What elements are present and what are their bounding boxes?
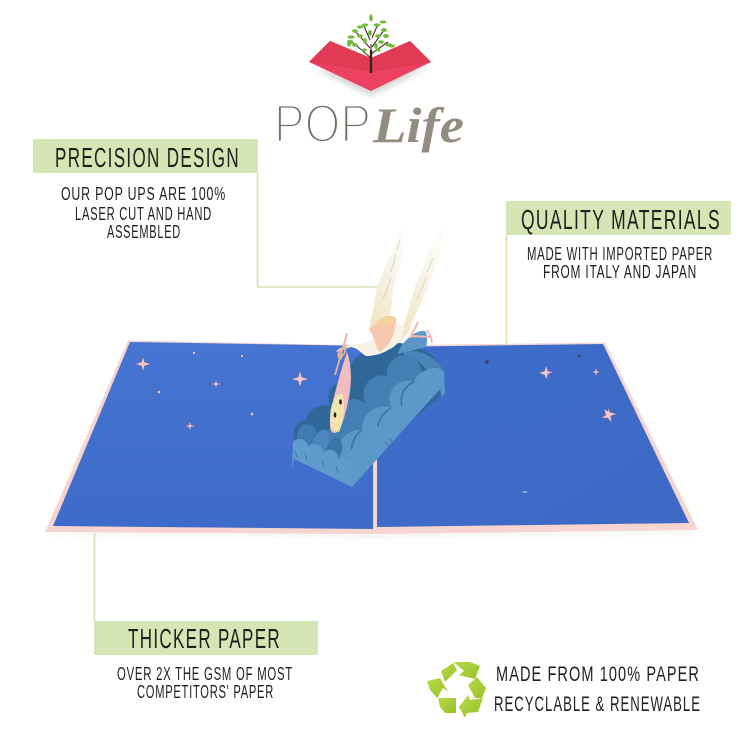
card: left blue panel <box>53 342 373 529</box>
logo wordmark: Life: Life <box>372 97 464 153</box>
callout connector lines <box>94 173 506 621</box>
text: thicker description: COMPETITORS' PAPER <box>137 682 274 702</box>
recycling note <box>427 662 701 718</box>
callout: thicker paper <box>94 621 318 702</box>
pop-up card photo <box>45 225 698 537</box>
text: thicker description <box>117 664 293 702</box>
heading: thicker paper: THICKER PAPER <box>128 623 281 654</box>
callout: precision design <box>33 139 258 242</box>
stork: baby bundle <box>330 352 351 433</box>
card: right blue panel <box>377 344 689 527</box>
callout: quality materials <box>506 201 731 282</box>
text: quality description <box>527 244 713 282</box>
text: precision description <box>61 184 226 242</box>
icon: open book with tree <box>309 14 431 96</box>
logo: Pop Life <box>274 14 464 154</box>
stork: wings <box>369 225 442 344</box>
pop-up: stork <box>330 225 442 433</box>
clouds: back arch <box>404 351 444 392</box>
card: pink base <box>45 340 698 537</box>
fold line <box>373 462 377 534</box>
logo wordmark: POP: POP <box>274 94 371 154</box>
clouds: small front-left lobes <box>297 424 346 469</box>
clouds: front row <box>338 370 439 472</box>
heading: thicker paper <box>94 621 318 655</box>
stars cut-outs <box>135 352 617 432</box>
text: thicker description: OVER 2X THE GSM OF MOST <box>117 664 293 684</box>
text: precision description: OUR POP UPS ARE 100% <box>61 184 226 204</box>
clouds: middle row <box>319 355 430 470</box>
clouds: row dividers <box>352 382 414 460</box>
clouds: dark back row <box>293 343 442 470</box>
text: precision description: LASER CUT AND HAND <box>75 204 212 224</box>
clouds: front left wall <box>292 439 352 487</box>
stork: tail ribbon and cloud <box>398 322 432 354</box>
heading: precision design: PRECISION DESIGN <box>55 142 240 173</box>
text: recycling message <box>494 662 701 716</box>
pop-up: cloud structure <box>292 343 445 487</box>
clouds: blue gap <box>372 390 438 458</box>
stork: beak and bow <box>335 333 347 375</box>
stork: body <box>336 316 404 356</box>
clouds: front right wall <box>348 368 445 487</box>
text: precision description: ASSEMBLED <box>107 222 181 242</box>
heading: precision design <box>33 139 258 173</box>
icon: recycle arrows <box>427 662 486 718</box>
